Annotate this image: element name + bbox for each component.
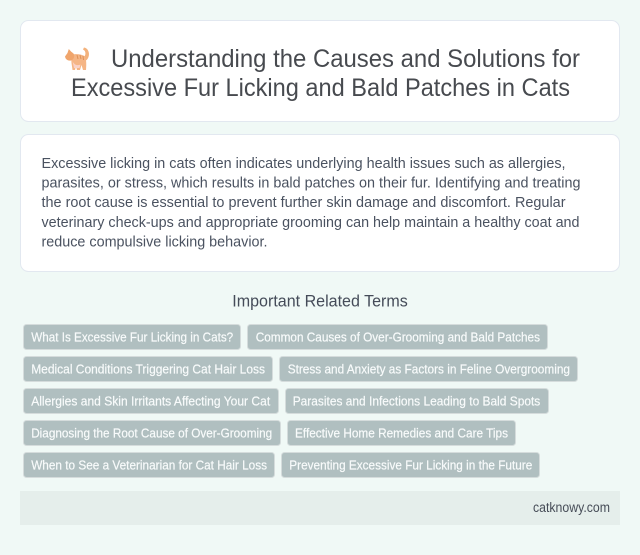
- description text: reduce compulsive licking behavior.: [42, 233, 268, 250]
- chip: allergies: Allergies and Skin Irritants Affecting Your Cat: [31, 393, 271, 408]
- chip: when to see a veterinarian: [24, 452, 274, 478]
- chip: home remedies: [288, 420, 516, 446]
- description text: the root cause is essential to prevent further skin damage and discomfort. Regular: [42, 194, 566, 211]
- chip: preventing: Preventing Excessive Fur Licking in the Future: [289, 457, 532, 472]
- chip: common causes: Common Causes of Over-Grooming and Bald Patches: [256, 329, 540, 344]
- footer: [20, 491, 620, 525]
- chip: stress and anxiety: Stress and Anxiety as Factors in Feline Overgrooming: [288, 361, 570, 376]
- chip: preventing: [282, 452, 540, 478]
- chip: what is excessive fur licking: What Is Excessive Fur Licking in Cats?: [31, 329, 233, 344]
- chip: parasites: Parasites and Infections Leading to Bald Spots: [293, 393, 541, 408]
- panel: title card: [20, 20, 620, 122]
- chip: stress and anxiety: [280, 356, 578, 382]
- panel: related term chips: [24, 324, 578, 478]
- chip: home remedies: Effective Home Remedies and Care Tips: [295, 425, 508, 440]
- description text: [42, 155, 580, 250]
- panel: description card: [20, 134, 620, 272]
- description text: veterinary check-ups and appropriate grooming can help maintain a healthy coat and: [42, 214, 580, 231]
- chip: common causes: [248, 324, 548, 350]
- chip: when to see a veterinarian: When to See a Veterinarian for Cat Hair Loss: [31, 457, 267, 472]
- footer source: catknowy.com: [533, 500, 610, 515]
- description text: parasites, or stress, which results in bald patches on their fur. Identifying and treating: [42, 175, 580, 192]
- chip: what is excessive fur licking: [24, 324, 240, 350]
- chip: diagnosing: [24, 420, 280, 446]
- heading: important related terms: Important Related Terms: [232, 293, 408, 311]
- chip: diagnosing: Diagnosing the Root Cause of Over-Grooming: [31, 425, 272, 440]
- icon: cat: [65, 48, 89, 70]
- chip: parasites: [286, 388, 548, 414]
- title line 2: Excessive Fur Licking and Bald Patches in Cats: [71, 74, 570, 102]
- chip: medical conditions: Medical Conditions Triggering Cat Hair Loss: [31, 361, 265, 376]
- chip: medical conditions: [24, 356, 272, 382]
- description text: Excessive licking in cats often indicates underlying health issues such as allergies,: [42, 155, 566, 172]
- title line 1: Understanding the Causes and Solutions for: [111, 45, 580, 73]
- chip: allergies: [24, 388, 278, 414]
